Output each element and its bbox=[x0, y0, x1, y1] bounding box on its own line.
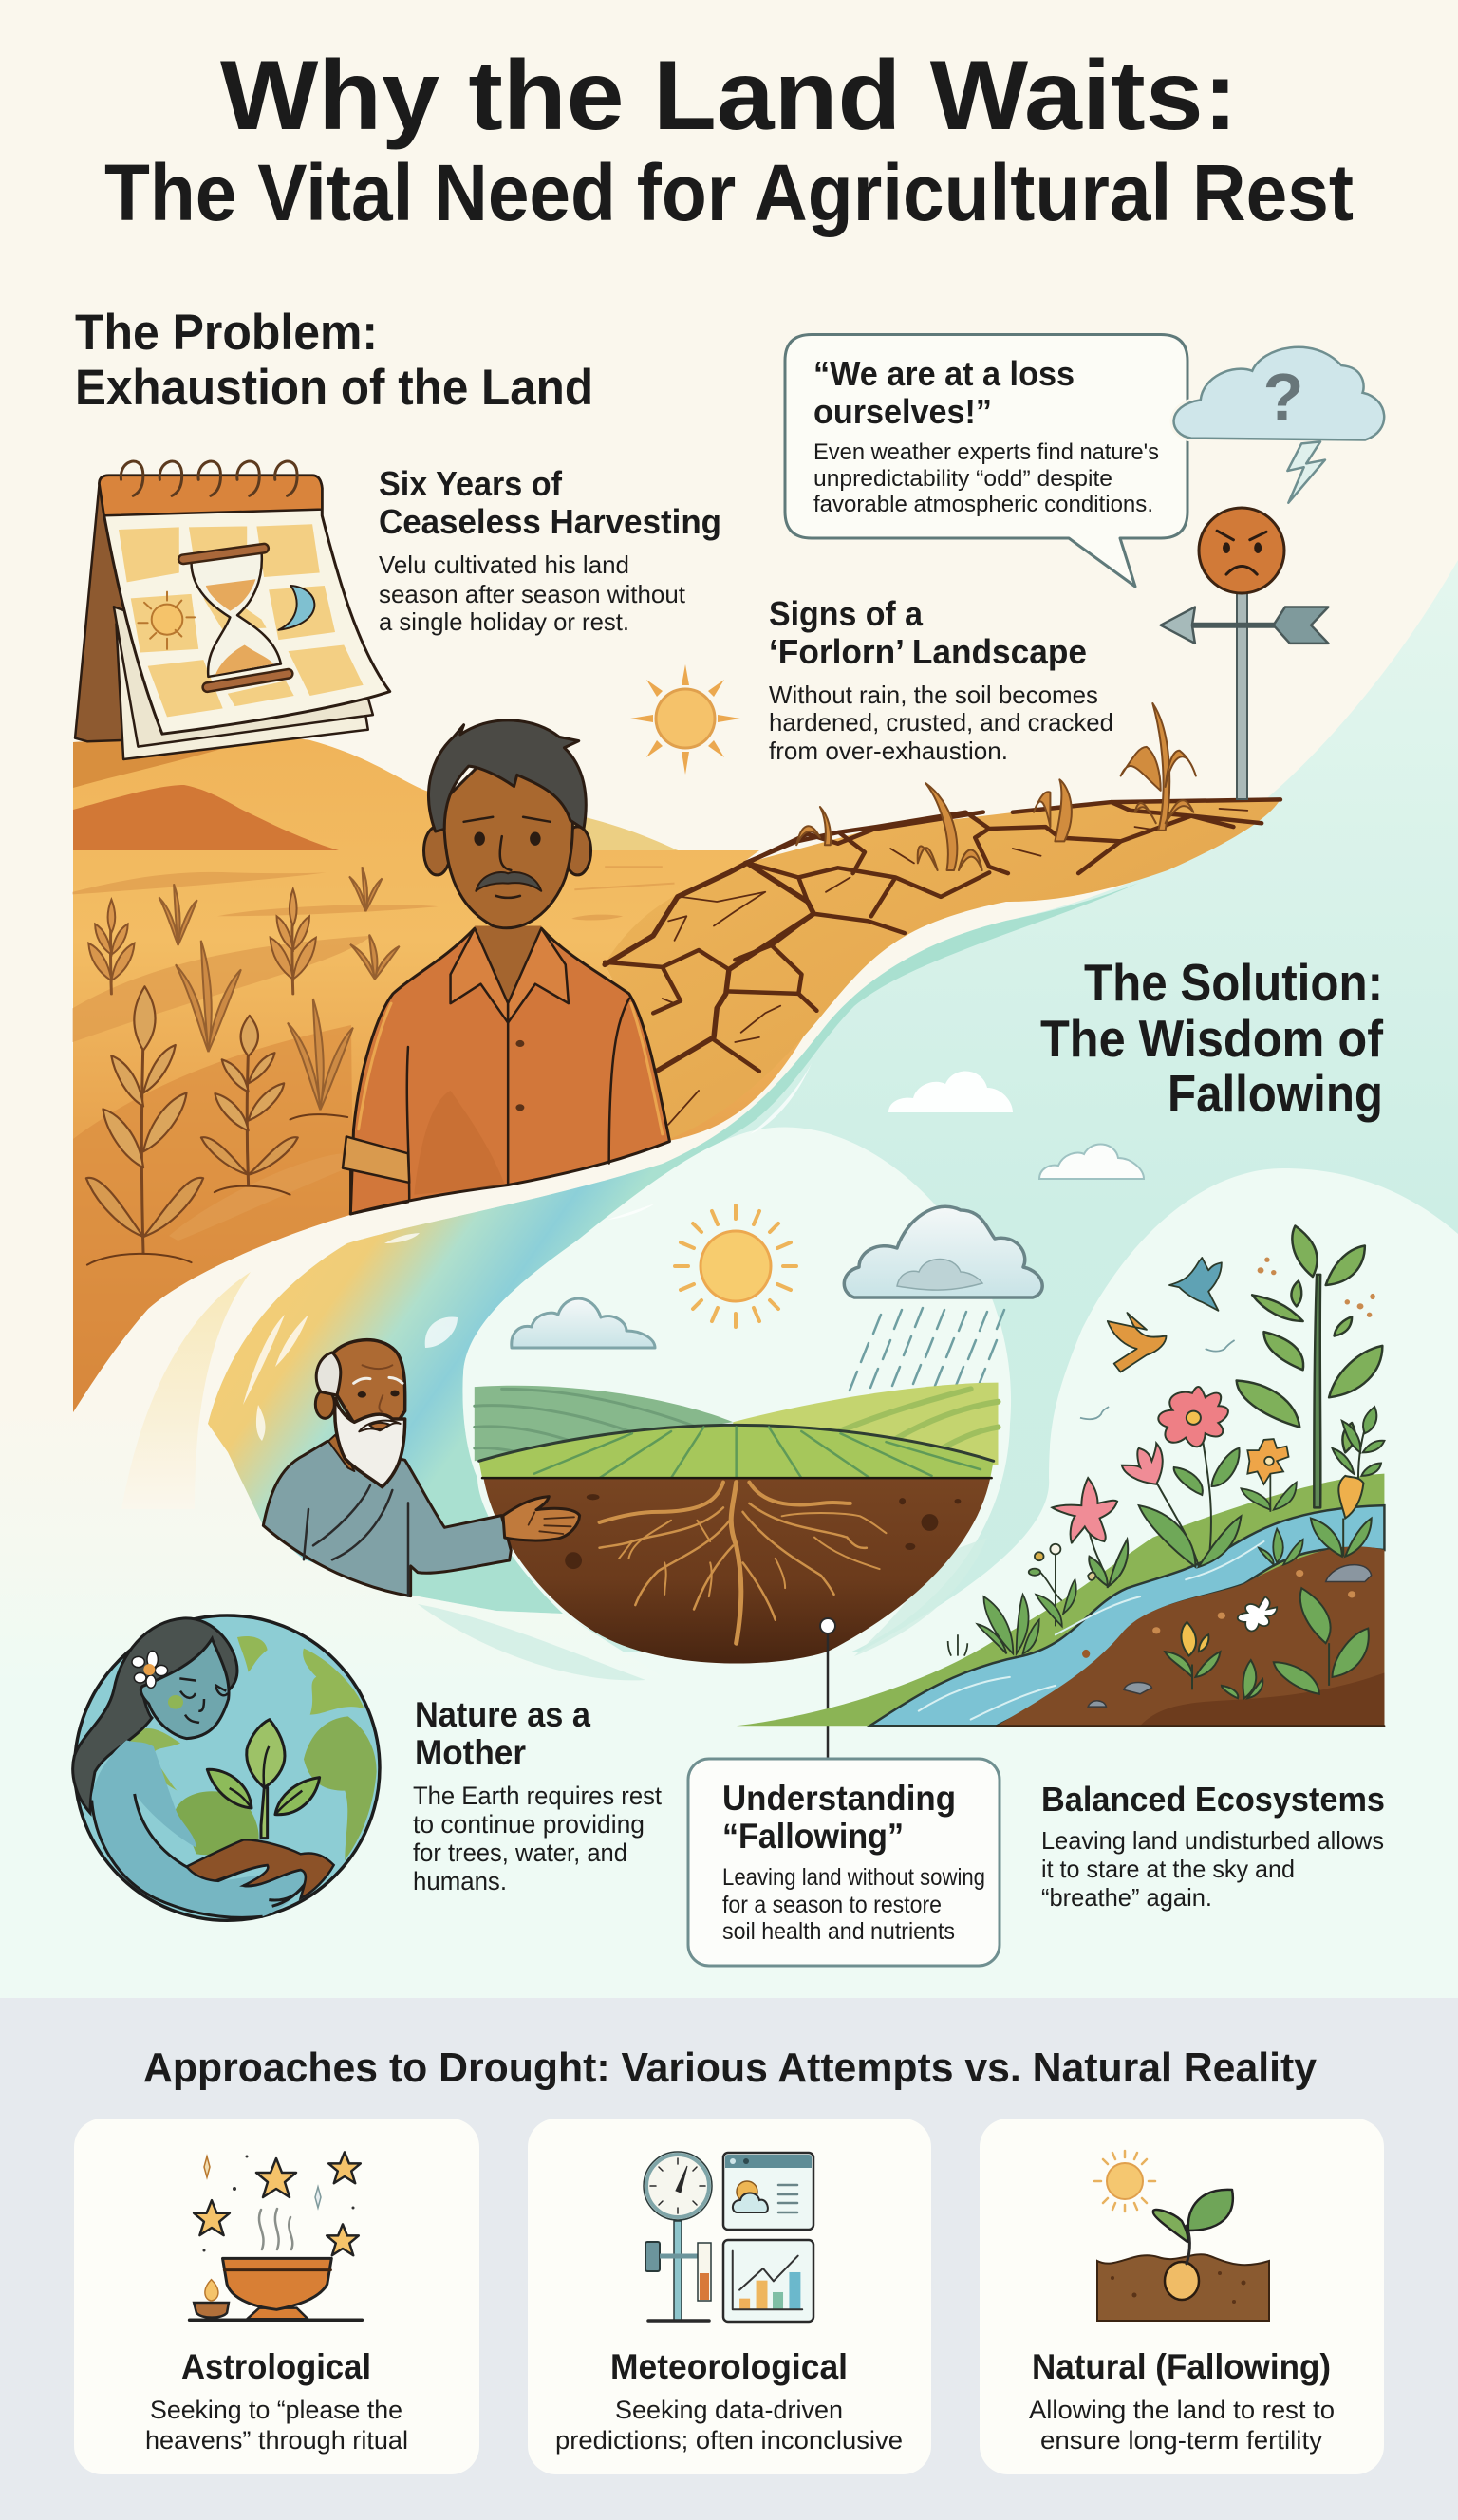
neck bbox=[328, 1435, 354, 1471]
heading: the problem bbox=[75, 305, 593, 416]
card: natural fallowing: Natural (Fallowing) bbox=[1032, 2347, 1331, 2386]
soil bbox=[483, 1478, 990, 1664]
flower in hair bbox=[132, 1651, 168, 1688]
card: natural fallowing bbox=[980, 2119, 1384, 2474]
text block: signs of a forlorn landscape: ‘Forlorn’ Landscape bbox=[769, 632, 1087, 671]
icon: bowl, lamp and stars bbox=[190, 2152, 362, 2320]
seedling bbox=[207, 1720, 320, 1839]
arm and cuff bbox=[350, 1170, 408, 1214]
text block: signs of a forlorn landscape: Without rain, the soil becomes bbox=[769, 681, 1098, 709]
callout: we are at a loss: unpredictability “odd” despite bbox=[813, 466, 1112, 492]
panel: approaches to drought bbox=[0, 1998, 1458, 2520]
text block: six years of harvesting: Six Years of bbox=[379, 464, 563, 503]
facial features bbox=[464, 817, 551, 898]
text block: six years of harvesting: season after season without bbox=[379, 580, 686, 608]
illustration: farmer Velu bbox=[343, 720, 669, 1214]
heading: the solution: Fallowing bbox=[1168, 1064, 1383, 1123]
side hair bbox=[316, 1353, 341, 1395]
title bbox=[104, 41, 1354, 237]
card: meteorological: Seeking data-driven bbox=[615, 2396, 843, 2424]
finger lines bbox=[529, 1512, 574, 1534]
earth cracks right bbox=[745, 799, 1280, 873]
icon: white cloud lower bbox=[1039, 1144, 1144, 1179]
head bbox=[332, 1340, 405, 1424]
field shading and streaks bbox=[73, 1025, 353, 1412]
text block: balanced ecosystems: “breathe” again. bbox=[1041, 1883, 1212, 1912]
text block: nature as a mother bbox=[413, 1695, 662, 1895]
soil plants bbox=[1165, 1588, 1369, 1698]
icon: question-mark storm cloud: ? bbox=[1263, 360, 1303, 434]
orange hill bbox=[73, 785, 339, 850]
heading: the solution bbox=[1040, 953, 1384, 1123]
heading: the problem: The Problem: bbox=[75, 305, 378, 361]
callout box: understanding fallowing: Understanding bbox=[722, 1779, 956, 1818]
front field bbox=[479, 1425, 994, 1478]
ear bbox=[315, 1390, 334, 1418]
icon: mother earth holding seedling bbox=[73, 1615, 380, 1920]
card: meteorological bbox=[528, 2119, 931, 2474]
dry crops bbox=[86, 867, 400, 1265]
faint mint swoosh beneath bowl bbox=[418, 1538, 987, 1680]
withered plants bbox=[796, 703, 1196, 870]
ears bbox=[424, 827, 451, 875]
callout: we are at a loss bbox=[785, 334, 1187, 587]
text block: nature as a mother: Mother bbox=[415, 1733, 526, 1772]
text block: six years of harvesting bbox=[379, 464, 721, 636]
earth cracks left bbox=[605, 812, 989, 1125]
heading: the problem: Exhaustion of the Land bbox=[75, 360, 593, 416]
card: astrological: Seeking to “please the bbox=[150, 2396, 402, 2424]
callout box: understanding fallowing: soil health and nutrients bbox=[722, 1918, 955, 1945]
icon: weather vane with frowning face bbox=[1161, 508, 1328, 799]
icon: calendar with hourglass bbox=[75, 461, 390, 759]
face bbox=[444, 752, 572, 928]
text block: balanced ecosystems: Balanced Ecosystems bbox=[1041, 1780, 1385, 1819]
soil in hands bbox=[187, 1839, 334, 1898]
small right sprig bbox=[1333, 1407, 1384, 1478]
orange ground bbox=[73, 737, 821, 1412]
text block: six years of harvesting: Velu cultivated his land bbox=[379, 551, 629, 579]
card: astrological: heavens” through ritual bbox=[145, 2426, 408, 2455]
icon: sun over dry land bbox=[630, 664, 740, 775]
text block: signs of a forlorn landscape bbox=[769, 594, 1113, 765]
shirt bbox=[350, 928, 669, 1214]
callout box: understanding fallowing: “Fallowing” bbox=[722, 1817, 904, 1856]
water highlights bbox=[243, 1063, 812, 1441]
text block: nature as a mother: to continue providing bbox=[413, 1810, 645, 1839]
text block: balanced ecosystems: it to stare at the sky and bbox=[1041, 1855, 1295, 1883]
callout box: understanding fallowing bbox=[688, 1759, 1000, 1966]
card: astrological: Astrological bbox=[181, 2347, 371, 2386]
back hills bbox=[475, 1386, 733, 1461]
text block: nature as a mother: Nature as a bbox=[415, 1695, 590, 1734]
tall plant bbox=[1237, 1226, 1382, 1507]
illustration: garden with stream bbox=[737, 1226, 1384, 1726]
water band bbox=[208, 883, 1139, 1614]
heading: approaches: Approaches to Drought: Various Attempts vs. Natural Reality bbox=[143, 2044, 1318, 2091]
pink flower large bbox=[1158, 1387, 1240, 1562]
stream bbox=[869, 1505, 1384, 1726]
text block: nature as a mother: for trees, water, and bbox=[413, 1839, 627, 1867]
panel: dry orange landscape bbox=[73, 703, 1280, 1412]
woman face bbox=[140, 1639, 229, 1739]
birds bbox=[1080, 1258, 1235, 1419]
orange tulip bbox=[1311, 1476, 1372, 1557]
text block: signs of a forlorn landscape: Signs of a bbox=[769, 594, 924, 633]
shirt shading bbox=[414, 1091, 505, 1195]
hair bbox=[429, 720, 586, 831]
light bubble behind the soil cross-section bbox=[462, 1128, 1011, 1669]
connector: marker to understanding fallowing bbox=[820, 1618, 835, 1759]
card: meteorological: Meteorological bbox=[610, 2347, 848, 2386]
pink tulip and star flower bbox=[1052, 1444, 1241, 1588]
back dark band bbox=[73, 737, 256, 788]
callout: we are at a loss: favorable atmospheric conditions. bbox=[813, 492, 1153, 517]
hair bbox=[73, 1618, 237, 1813]
callout: we are at a loss: “We are at a loss bbox=[813, 354, 1075, 393]
callout box: understanding fallowing: Leaving land without sowing bbox=[722, 1864, 985, 1891]
lower-left ground fading from cream to mint bbox=[0, 1395, 683, 1998]
orange flower bbox=[1241, 1439, 1297, 1512]
callout: we are at a loss: Even weather experts find nature's bbox=[813, 439, 1159, 465]
illustration: farmland bowl with roots bbox=[475, 1383, 999, 1664]
cracked earth bbox=[605, 799, 1280, 1142]
text block: balanced ecosystems: Leaving land undisturbed allows bbox=[1041, 1826, 1384, 1855]
text block: nature as a mother: The Earth requires rest bbox=[413, 1782, 662, 1810]
text block: six years of harvesting: a single holiday or rest. bbox=[379, 607, 629, 636]
text block: nature as a mother: humans. bbox=[413, 1867, 507, 1895]
roots bbox=[600, 1483, 886, 1643]
card: astrological bbox=[74, 2119, 479, 2474]
green slope bbox=[737, 1474, 1384, 1726]
soil bank bbox=[997, 1546, 1384, 1726]
white blossom bbox=[1238, 1596, 1277, 1631]
card: meteorological: predictions; often inconclusive bbox=[555, 2426, 903, 2455]
body and arm bbox=[92, 1740, 310, 1917]
icon: cheerful sun bbox=[675, 1205, 796, 1327]
icon: rain cloud with rain bbox=[837, 1206, 1042, 1419]
pale hill wedge bbox=[560, 812, 678, 850]
pale stripe along the water bbox=[122, 1272, 251, 1509]
callout box: understanding fallowing: for a season to restore bbox=[722, 1892, 942, 1918]
sky background: solution side bbox=[208, 560, 1458, 1998]
icon: gauge and weather dashboards bbox=[644, 2152, 813, 2322]
heading: the solution: The Wisdom of bbox=[1040, 1009, 1384, 1068]
robe bbox=[263, 1441, 511, 1596]
icon: white cloud upper bbox=[888, 1072, 1013, 1112]
hand bbox=[503, 1497, 580, 1540]
small buds and grass bbox=[948, 1529, 1303, 1656]
icon: question-mark storm cloud bbox=[1174, 347, 1384, 503]
illustration: wise old man bbox=[263, 1340, 580, 1596]
right blob and lower ground bbox=[563, 1168, 1458, 1998]
title: Why the Land Waits: bbox=[220, 41, 1238, 151]
icon: sun, soil and sprouting seed bbox=[1094, 2151, 1269, 2321]
card: natural fallowing: ensure long-term fertility bbox=[1040, 2426, 1323, 2455]
text block: balanced ecosystems bbox=[1041, 1780, 1385, 1912]
text block: six years of harvesting: Ceaseless Harvesting bbox=[379, 502, 721, 541]
title: The Vital Need for Agricultural Rest bbox=[104, 148, 1354, 237]
callout: we are at a loss: ourselves!” bbox=[813, 392, 992, 431]
text block: signs of a forlorn landscape: hardened, crusted, and cracked bbox=[769, 708, 1113, 737]
beard bbox=[335, 1398, 405, 1487]
face features bbox=[354, 1365, 402, 1412]
card: natural fallowing: Allowing the land to rest to bbox=[1029, 2396, 1335, 2424]
heading: the solution: The Solution: bbox=[1084, 953, 1383, 1012]
text block: signs of a forlorn landscape: from over-exhaustion. bbox=[769, 737, 1008, 765]
icon: small cloud bbox=[512, 1298, 655, 1348]
